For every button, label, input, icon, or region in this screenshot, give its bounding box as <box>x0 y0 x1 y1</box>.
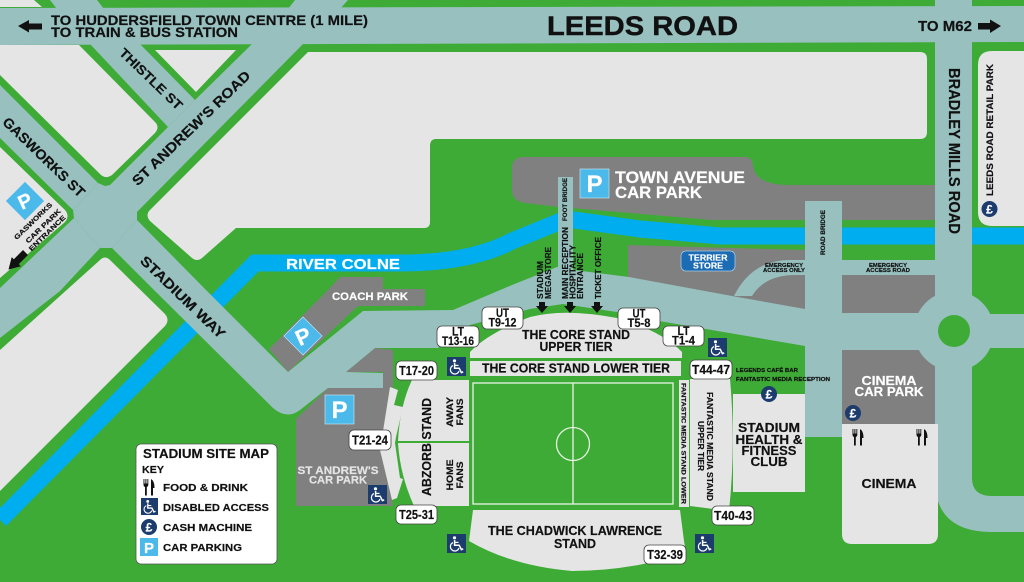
stand: abzorb: FANS <box>455 398 465 426</box>
turnstile: T17-20: T17-20 <box>399 364 434 378</box>
arrow: left <box>18 20 42 32</box>
turnstile: T44-47: T44-47 <box>692 363 730 377</box>
turnstile: UT T9-12: T9-12 <box>488 318 516 330</box>
label: main reception: ENTRANCE <box>575 253 585 299</box>
stand: chadwick lawrence: THE CHADWICK LAWRENCE <box>488 524 662 538</box>
gasworks car park <box>4 182 68 274</box>
turnstile: T17-20 <box>396 361 437 380</box>
road label: thistle st: THISTLE ST <box>116 45 186 113</box>
label: emergency access road: ACCESS ROAD <box>866 268 910 274</box>
stand: abzorb: HOME <box>445 460 455 490</box>
health and fitness club: FITNESS <box>742 443 797 458</box>
legend icon: parking <box>140 538 158 557</box>
road label: gasworks st: GASWORKS ST <box>0 114 89 201</box>
turnstile: UT T5-8 <box>618 308 660 330</box>
stand: fantastic media lower <box>679 380 689 507</box>
stand: fantastic media upper: FANTASTIC MEDIA STAND <box>705 392 714 501</box>
legend icon: food <box>144 479 154 496</box>
icon: parking coach park: P <box>291 322 315 351</box>
label: emergency access only <box>763 263 805 274</box>
legends cafe bar label: FANTASTIC MEDIA RECEPTION <box>736 377 830 383</box>
coach park label: COACH PARK <box>332 291 408 303</box>
icon: cash machine retail park <box>982 201 998 217</box>
icon: disabled access chadwick right <box>695 534 714 553</box>
turnstile: LT T13-16 <box>437 326 479 348</box>
gasworks entrance label <box>13 201 68 253</box>
legend text: cash: CASH MACHINE <box>163 522 252 534</box>
turnstile: T44-47 <box>690 360 732 379</box>
road label: to M62: TO M62 <box>918 19 972 35</box>
gasworks entrance label: ENTRANCE <box>28 214 68 253</box>
icon: gasworks parking: P <box>15 189 36 215</box>
road label: stadium way: STADIUM WAY <box>137 252 229 342</box>
road label: to town centre: TO TRAIN & BUS STATION <box>51 24 238 40</box>
turnstile labels <box>349 307 754 564</box>
icon: food cinema right <box>916 429 928 446</box>
label: road bridge: ROAD BRIDGE <box>821 210 827 255</box>
town avenue label: TOWN AVENUE <box>615 169 745 187</box>
cinema car park label: CAR PARK <box>854 384 924 399</box>
strip beside abzorb stand <box>380 387 403 500</box>
label: stadium megastore: MEGASTORE <box>543 247 553 299</box>
car parks grey areas <box>269 157 936 506</box>
label: main reception: HOSPITALITY <box>568 245 578 299</box>
stadium stands <box>380 313 733 571</box>
roundabout centre <box>938 315 970 347</box>
stand: fantastic media upper <box>690 379 733 511</box>
legend text: parking: CAR PARKING <box>163 542 242 554</box>
entrance labels and arrows <box>535 227 603 313</box>
stand: core upper tier <box>470 313 682 358</box>
icon: cash machine health club: £ <box>766 388 773 402</box>
turnstile: LT T13-16: T13-16 <box>442 336 474 348</box>
turnstile: LT T1-4 <box>663 326 704 348</box>
stand: abzorb: ABZORB STAND <box>419 398 434 496</box>
legend icon: parking: P <box>144 540 154 557</box>
st andrew's car park label: CAR PARK <box>309 474 367 486</box>
label: ticket office: TICKET OFFICE <box>593 237 603 299</box>
stand: fantastic media lower: FANTASTIC MEDIA STAND LOWER <box>680 383 687 504</box>
town avenue car park <box>580 169 745 202</box>
turnstile: UT T5-8: UT <box>632 308 646 320</box>
icon: parking town avenue <box>580 169 609 198</box>
turnstile: T21-24 <box>349 430 391 450</box>
terrier store sign: TERRIER <box>688 252 728 262</box>
label: foot bridge: FOOT BRIDGE <box>563 178 569 221</box>
icon: disabled access chadwick left <box>447 534 466 553</box>
turnstile: UT T9-12 <box>482 307 523 330</box>
road label: to town centre <box>51 12 368 40</box>
legend text: food: FOOD & DRINK <box>163 482 248 494</box>
town avenue label <box>615 169 745 202</box>
health and fitness club: STADIUM <box>738 420 800 435</box>
label: leeds road retail park: LEEDS ROAD RETAIL PARK <box>985 64 996 196</box>
icon: disabled access core left <box>447 357 466 376</box>
arrow: right <box>978 20 1001 33</box>
turnstile: T32-39 <box>644 545 686 564</box>
label: stadium megastore <box>535 247 553 299</box>
turnstile: T32-39: T32-39 <box>647 548 683 562</box>
icon: parking town avenue: P <box>586 171 603 198</box>
label: emergency access only: ACCESS ONLY <box>763 268 805 274</box>
icon: cash machine health club <box>761 386 777 402</box>
stand: abzorb: FANS <box>455 462 465 488</box>
turnstile: T25-31: T25-31 <box>399 508 434 522</box>
road label: bradley mills road: BRADLEY MILLS ROAD <box>945 68 962 234</box>
turnstile: LT T1-4: LT <box>678 326 690 338</box>
gasworks entrance label: CAR PARK <box>25 208 63 245</box>
legend icon: cash: £ <box>146 520 153 534</box>
health and fitness club <box>733 394 805 492</box>
panel: legend key <box>136 444 277 564</box>
road label: st andrew's road: ST ANDREW'S ROAD <box>129 67 253 189</box>
turnstile: UT T5-8: T5-8 <box>628 318 651 330</box>
health and fitness club: CLUB <box>750 454 788 469</box>
stand: chadwick lawrence: STAND <box>554 537 596 551</box>
label: emergency access road <box>866 263 910 274</box>
label: main reception <box>560 227 585 299</box>
st andrew's car park label: ST ANDREW'S <box>298 465 378 477</box>
turnstile: UT T9-12: UT <box>496 308 509 320</box>
stand: abzorb <box>398 380 469 506</box>
arrow: gasworks entrance <box>4 248 30 274</box>
cinema: CINEMA <box>862 476 917 491</box>
turnstile: T25-31 <box>396 505 437 524</box>
cinema <box>842 424 938 544</box>
icon: parking st andrew's <box>325 395 354 424</box>
icon: cash machine retail park: £ <box>986 202 993 216</box>
icon: disabled access core right <box>708 338 727 357</box>
terrier store sign: STORE <box>693 260 723 270</box>
river label: RIVER COLNE <box>286 256 400 273</box>
icon: parking st andrew's: P <box>331 397 348 424</box>
legend icon: cash <box>141 519 157 535</box>
turnstile: T40-43: T40-43 <box>714 509 752 523</box>
legend key heading: KEY <box>142 464 164 476</box>
turnstile: LT T1-4: T1-4 <box>672 336 696 348</box>
health and fitness club: HEALTH & <box>736 432 802 447</box>
st andrew's car park label <box>298 465 378 486</box>
label: main reception: MAIN RECEPTION <box>560 227 570 299</box>
label: emergency access road: EMERGENCY <box>869 263 907 269</box>
icon: disabled access st andrew's <box>368 485 387 504</box>
turnstile: T21-24: T21-24 <box>352 434 388 448</box>
road label: to town centre: TO HUDDERSFIELD TOWN CENTRE (1 MILE) <box>51 12 368 28</box>
legends cafe bar label: LEGENDS CAFÉ BAR <box>736 366 798 374</box>
icon: food cinema left <box>852 429 864 446</box>
arrows: entrances <box>536 302 603 313</box>
turnstile: T40-43 <box>712 506 754 525</box>
legend icon: disabled <box>141 498 158 515</box>
cinema car park label: CINEMA <box>862 373 917 388</box>
icon: parking coach park <box>284 317 323 356</box>
pitch <box>473 383 673 504</box>
stand: core upper tier: THE CORE STAND <box>522 328 630 342</box>
stand: fantastic media upper: UPPER TIER <box>696 421 705 471</box>
stand: core lower tier: THE CORE STAND LOWER TIER <box>482 362 670 376</box>
legend title: STADIUM SITE MAP <box>143 447 269 461</box>
icon: cash machine cinema: £ <box>850 406 857 420</box>
cinema car park label <box>854 373 924 399</box>
label: stadium megastore: STADIUM <box>535 261 545 299</box>
terrier store sign <box>681 251 735 271</box>
stand: abzorb: AWAY <box>445 397 455 427</box>
gasworks entrance label: GASWORKS <box>13 201 55 242</box>
town avenue label: CAR PARK <box>615 184 702 202</box>
stand: chadwick lawrence <box>469 510 686 571</box>
label: emergency access only: EMERGENCY <box>765 263 803 269</box>
legend text: disabled: DISABLED ACCESS <box>163 502 269 514</box>
turnstile: LT T13-16: LT <box>452 326 464 338</box>
icon: cash machine cinema <box>845 405 861 421</box>
stand: core upper tier: UPPER TIER <box>540 340 612 354</box>
legends cafe bar label <box>736 366 830 383</box>
heading: leeds road: LEEDS ROAD <box>547 11 738 41</box>
